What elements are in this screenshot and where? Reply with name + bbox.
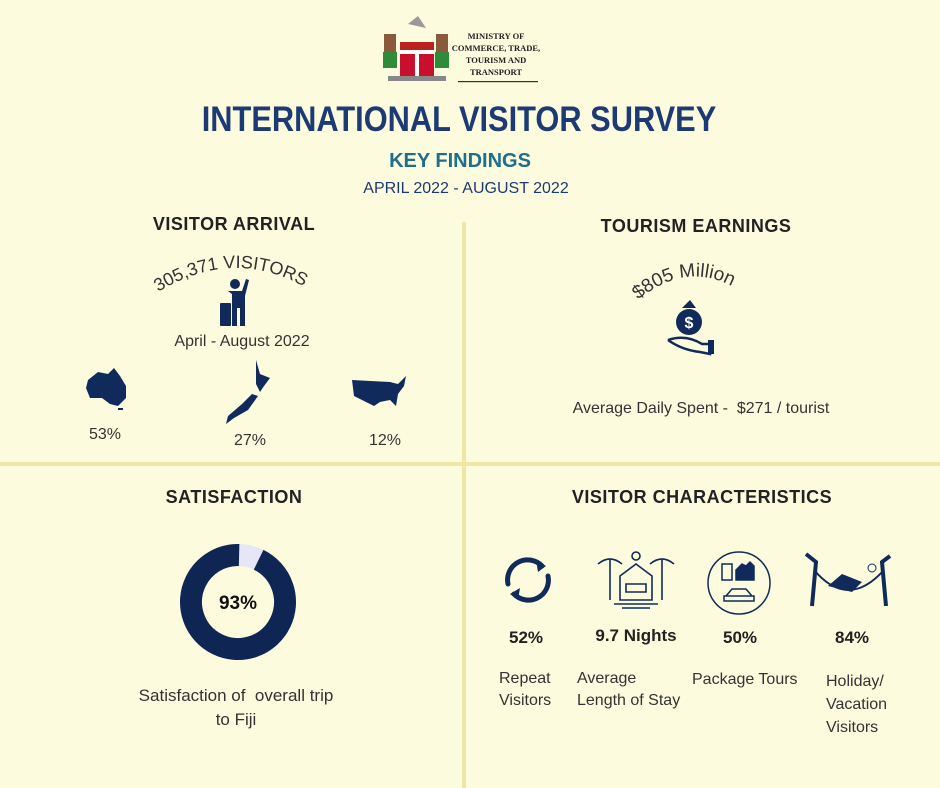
- panel: visitor characteristics: [499, 487, 892, 736]
- logo: ministry crest: TOURISM AND: [466, 55, 526, 65]
- date range: APRIL 2022 - AUGUST 2022: [363, 180, 569, 197]
- label repeat visitors: Repeat Visitors: [499, 670, 551, 709]
- label 27%: 27%: [234, 432, 266, 449]
- panel: satisfaction: [139, 487, 333, 729]
- label avg length: Average Length of Stay: [577, 670, 680, 709]
- stat 84%: 84%: [835, 628, 869, 647]
- curved visitors count: 305,371 VISITORS: [154, 256, 308, 290]
- text satisfaction desc: Satisfaction of overall trip: [139, 686, 333, 705]
- label 53%: 53%: [89, 426, 121, 443]
- text april-august: April - August 2022: [174, 333, 310, 350]
- title: INTERNATIONAL VISITOR SURVEY: [202, 100, 716, 139]
- heading tourism earnings: TOURISM EARNINGS: [601, 216, 791, 236]
- panel: visitor arrival: [86, 214, 406, 449]
- icon: usa: [352, 376, 406, 406]
- stat 50%: 50%: [723, 628, 757, 647]
- heading visitor arrival: VISITOR ARRIVAL: [153, 214, 315, 234]
- heading visitor characteristics: VISITOR CHARACTERISTICS: [572, 487, 832, 507]
- logo: ministry crest: TRANSPORT: [470, 67, 522, 77]
- icon: traveler: [220, 279, 249, 326]
- donut chart 93%: 93%: [219, 593, 257, 614]
- logo: ministry crest: [383, 16, 540, 82]
- text satisfaction desc: [139, 686, 333, 729]
- logo: ministry crest: COMMERCE, TRADE,: [452, 43, 540, 53]
- divider vertical: [462, 222, 466, 788]
- icon: money hand: $: [685, 315, 694, 332]
- icon: australia: [86, 368, 126, 410]
- logo: ministry crest: MINISTRY OF: [468, 31, 524, 41]
- heading satisfaction: SATISFACTION: [166, 487, 302, 507]
- panel: tourism earnings: [572, 216, 830, 417]
- divider horizontal: [0, 462, 940, 466]
- icon: repeat: [505, 557, 551, 603]
- stat 9.7 nights: 9.7 Nights: [595, 626, 677, 645]
- icon: beach hut: [598, 551, 674, 609]
- icon: package tours: [707, 551, 771, 615]
- text satisfaction desc: to Fiji: [216, 710, 256, 729]
- subtitle key findings: KEY FINDINGS: [389, 150, 531, 172]
- icon: money hand: [667, 300, 714, 356]
- icon: new zealand: [226, 360, 270, 424]
- icon: hammock: [804, 552, 892, 606]
- stat 52%: 52%: [509, 628, 543, 647]
- label 12%: 12%: [369, 432, 401, 449]
- donut chart 93%: [180, 544, 296, 660]
- label package tours: Package Tours: [692, 671, 798, 688]
- text avg daily spent: Average Daily Spent - $271 / tourist: [573, 400, 829, 417]
- label holiday: Holiday/ Vacation Visitors: [826, 673, 887, 736]
